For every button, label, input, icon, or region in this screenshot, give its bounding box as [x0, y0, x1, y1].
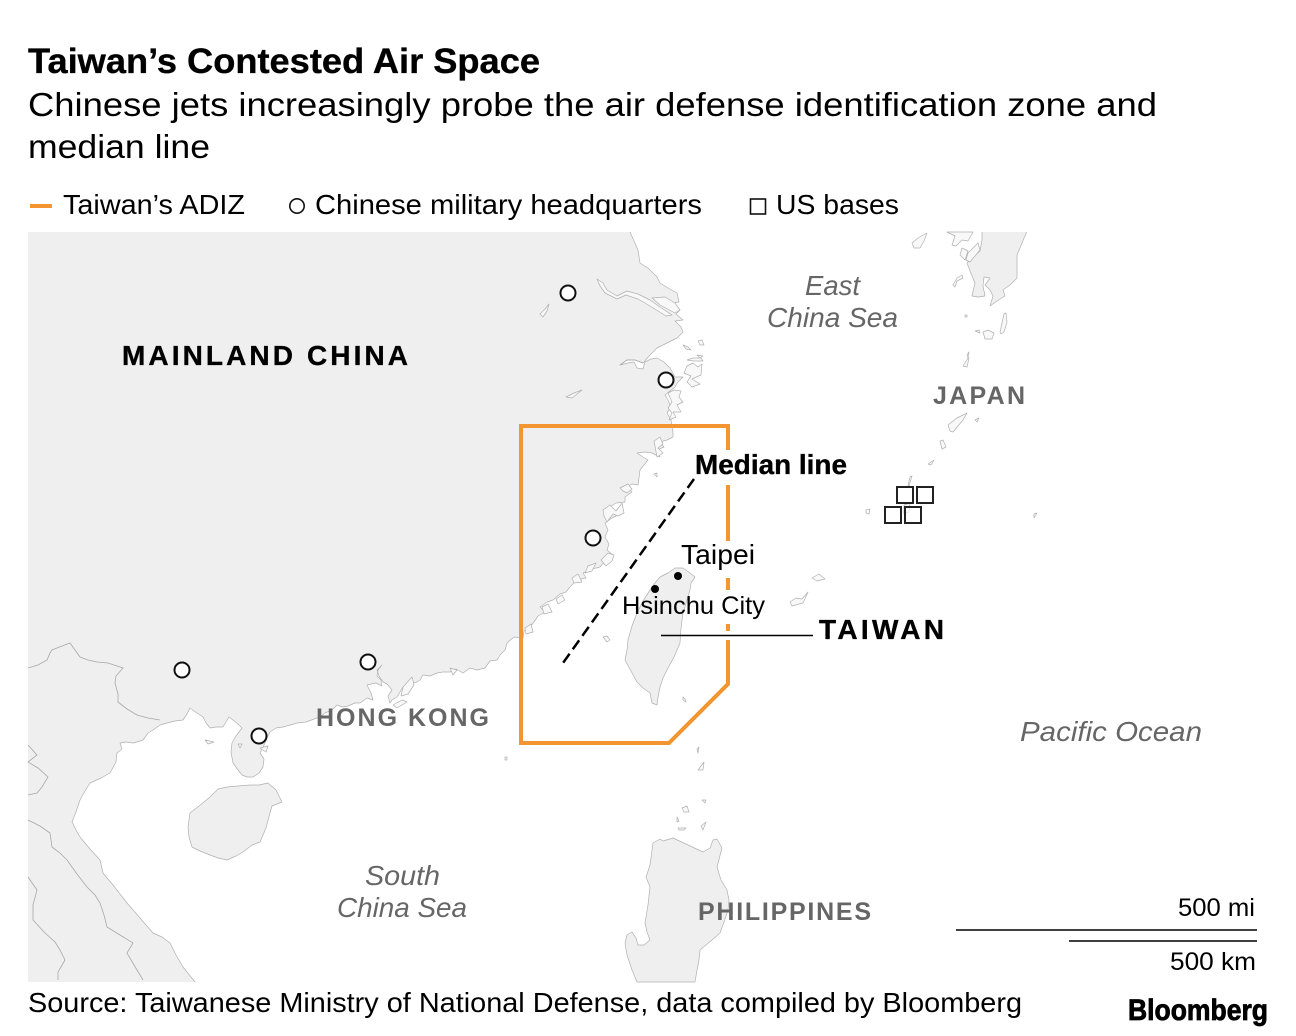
- label: Philippines: PHILIPPINES: [698, 898, 871, 926]
- label: East China Sea: China Sea: [767, 302, 898, 333]
- river: Yangtze estuary: [597, 279, 672, 316]
- subtitle: [28, 86, 1157, 165]
- label: South China Sea: South: [365, 860, 440, 891]
- river: Hangzhou bay: [620, 360, 643, 365]
- label: Japan: JAPAN: [933, 382, 1025, 410]
- scale bar: 500 mi: [1178, 894, 1255, 922]
- label: Hong Kong: HONG KONG: [316, 704, 489, 732]
- title: Taiwan’s Contested Air Space: [28, 42, 540, 81]
- map: [10, 220, 1257, 995]
- label: South China Sea: China Sea: [337, 892, 467, 923]
- subtitle: median line: [28, 128, 210, 165]
- label: Taiwan: TAIWAN: [819, 614, 944, 645]
- label: Median line: Median line: [695, 449, 847, 480]
- land: Hainan: [188, 783, 282, 860]
- label: Hsinchu City: Hsinchu City: [622, 592, 766, 620]
- median line: [563, 479, 694, 663]
- legend item: Chinese military headquarters: Chinese military headquarters: [315, 189, 702, 220]
- Bloomberg logo: Bloomberg: [1128, 994, 1268, 1027]
- US bases markers: [885, 487, 933, 523]
- source note: Source: Taiwanese Ministry of National Defense, data compiled by Bloomberg: [28, 987, 1022, 1018]
- scale bar: 500 km: [1170, 948, 1256, 976]
- label: East China Sea: [767, 270, 898, 333]
- land borders: [28, 643, 160, 980]
- label: Pacific Ocean: Pacific Ocean: [1020, 716, 1202, 747]
- legend item: US bases: US bases: [776, 189, 899, 220]
- ADIZ boundary: [521, 426, 728, 743]
- land: mainland Asia: [10, 220, 683, 995]
- land: Philippines, Luzon: [625, 838, 729, 982]
- label: Mainland China: MAINLAND CHINA: [122, 340, 408, 371]
- city dots: [651, 572, 682, 593]
- legend item: Taiwan's ADIZ: Taiwan’s ADIZ: [63, 189, 245, 220]
- subtitle: Chinese jets increasingly probe the air defense identification zone and: [28, 86, 1157, 123]
- scale bar: [956, 894, 1257, 976]
- small islands: [205, 232, 1037, 830]
- Taiwan leader line: [661, 634, 813, 636]
- legend: [30, 189, 899, 220]
- label: East China Sea: East: [805, 270, 861, 301]
- land: Taiwan: [625, 568, 695, 705]
- land masses: [10, 220, 1030, 995]
- label: South China Sea: [337, 860, 467, 923]
- Chinese military headquarters markers: [174, 286, 674, 744]
- land: Kyushu: [966, 232, 1027, 306]
- label: Taipei: Taipei: [681, 539, 755, 570]
